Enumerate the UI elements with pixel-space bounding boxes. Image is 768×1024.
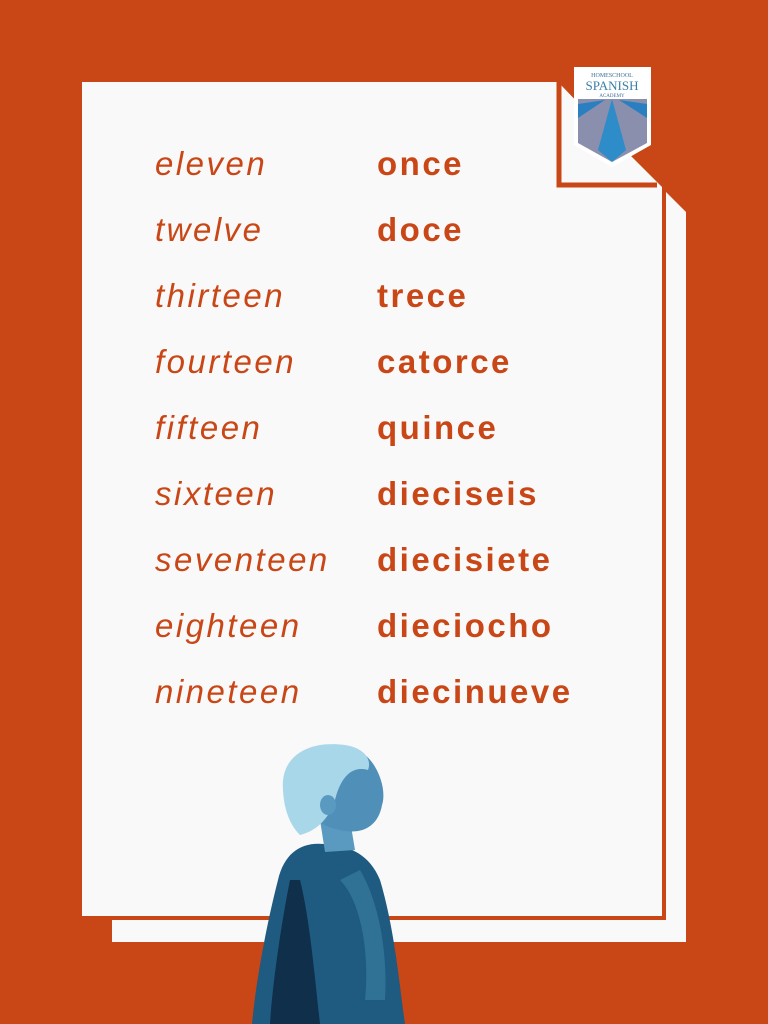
word list: eighteen — [155, 607, 302, 644]
word list: seventeen — [155, 541, 330, 578]
word list: doce — [377, 211, 464, 248]
logo: SPANISH — [586, 78, 638, 93]
word list: eleven — [155, 145, 267, 182]
logo: HOMESCHOOL — [591, 73, 633, 79]
folded corner — [559, 82, 657, 185]
word list — [155, 145, 573, 710]
word list: fourteen — [155, 343, 296, 380]
front card — [82, 82, 666, 918]
back card — [112, 190, 686, 942]
logo — [574, 67, 651, 167]
word list: thirteen — [155, 277, 285, 314]
word list: fifteen — [155, 409, 262, 446]
logo: ACADEMY — [599, 94, 625, 99]
word list: diecisiete — [377, 541, 552, 578]
word list: quince — [377, 409, 498, 446]
word list: once — [377, 145, 464, 182]
word list: dieciseis — [377, 475, 539, 512]
word list: twelve — [155, 211, 264, 248]
word list: sixteen — [155, 475, 277, 512]
word list: nineteen — [155, 673, 302, 710]
illustration: boy — [252, 744, 405, 1024]
word list: dieciocho — [377, 607, 554, 644]
word list: trece — [377, 277, 468, 314]
word list: catorce — [377, 343, 512, 380]
word list: diecinueve — [377, 673, 573, 710]
